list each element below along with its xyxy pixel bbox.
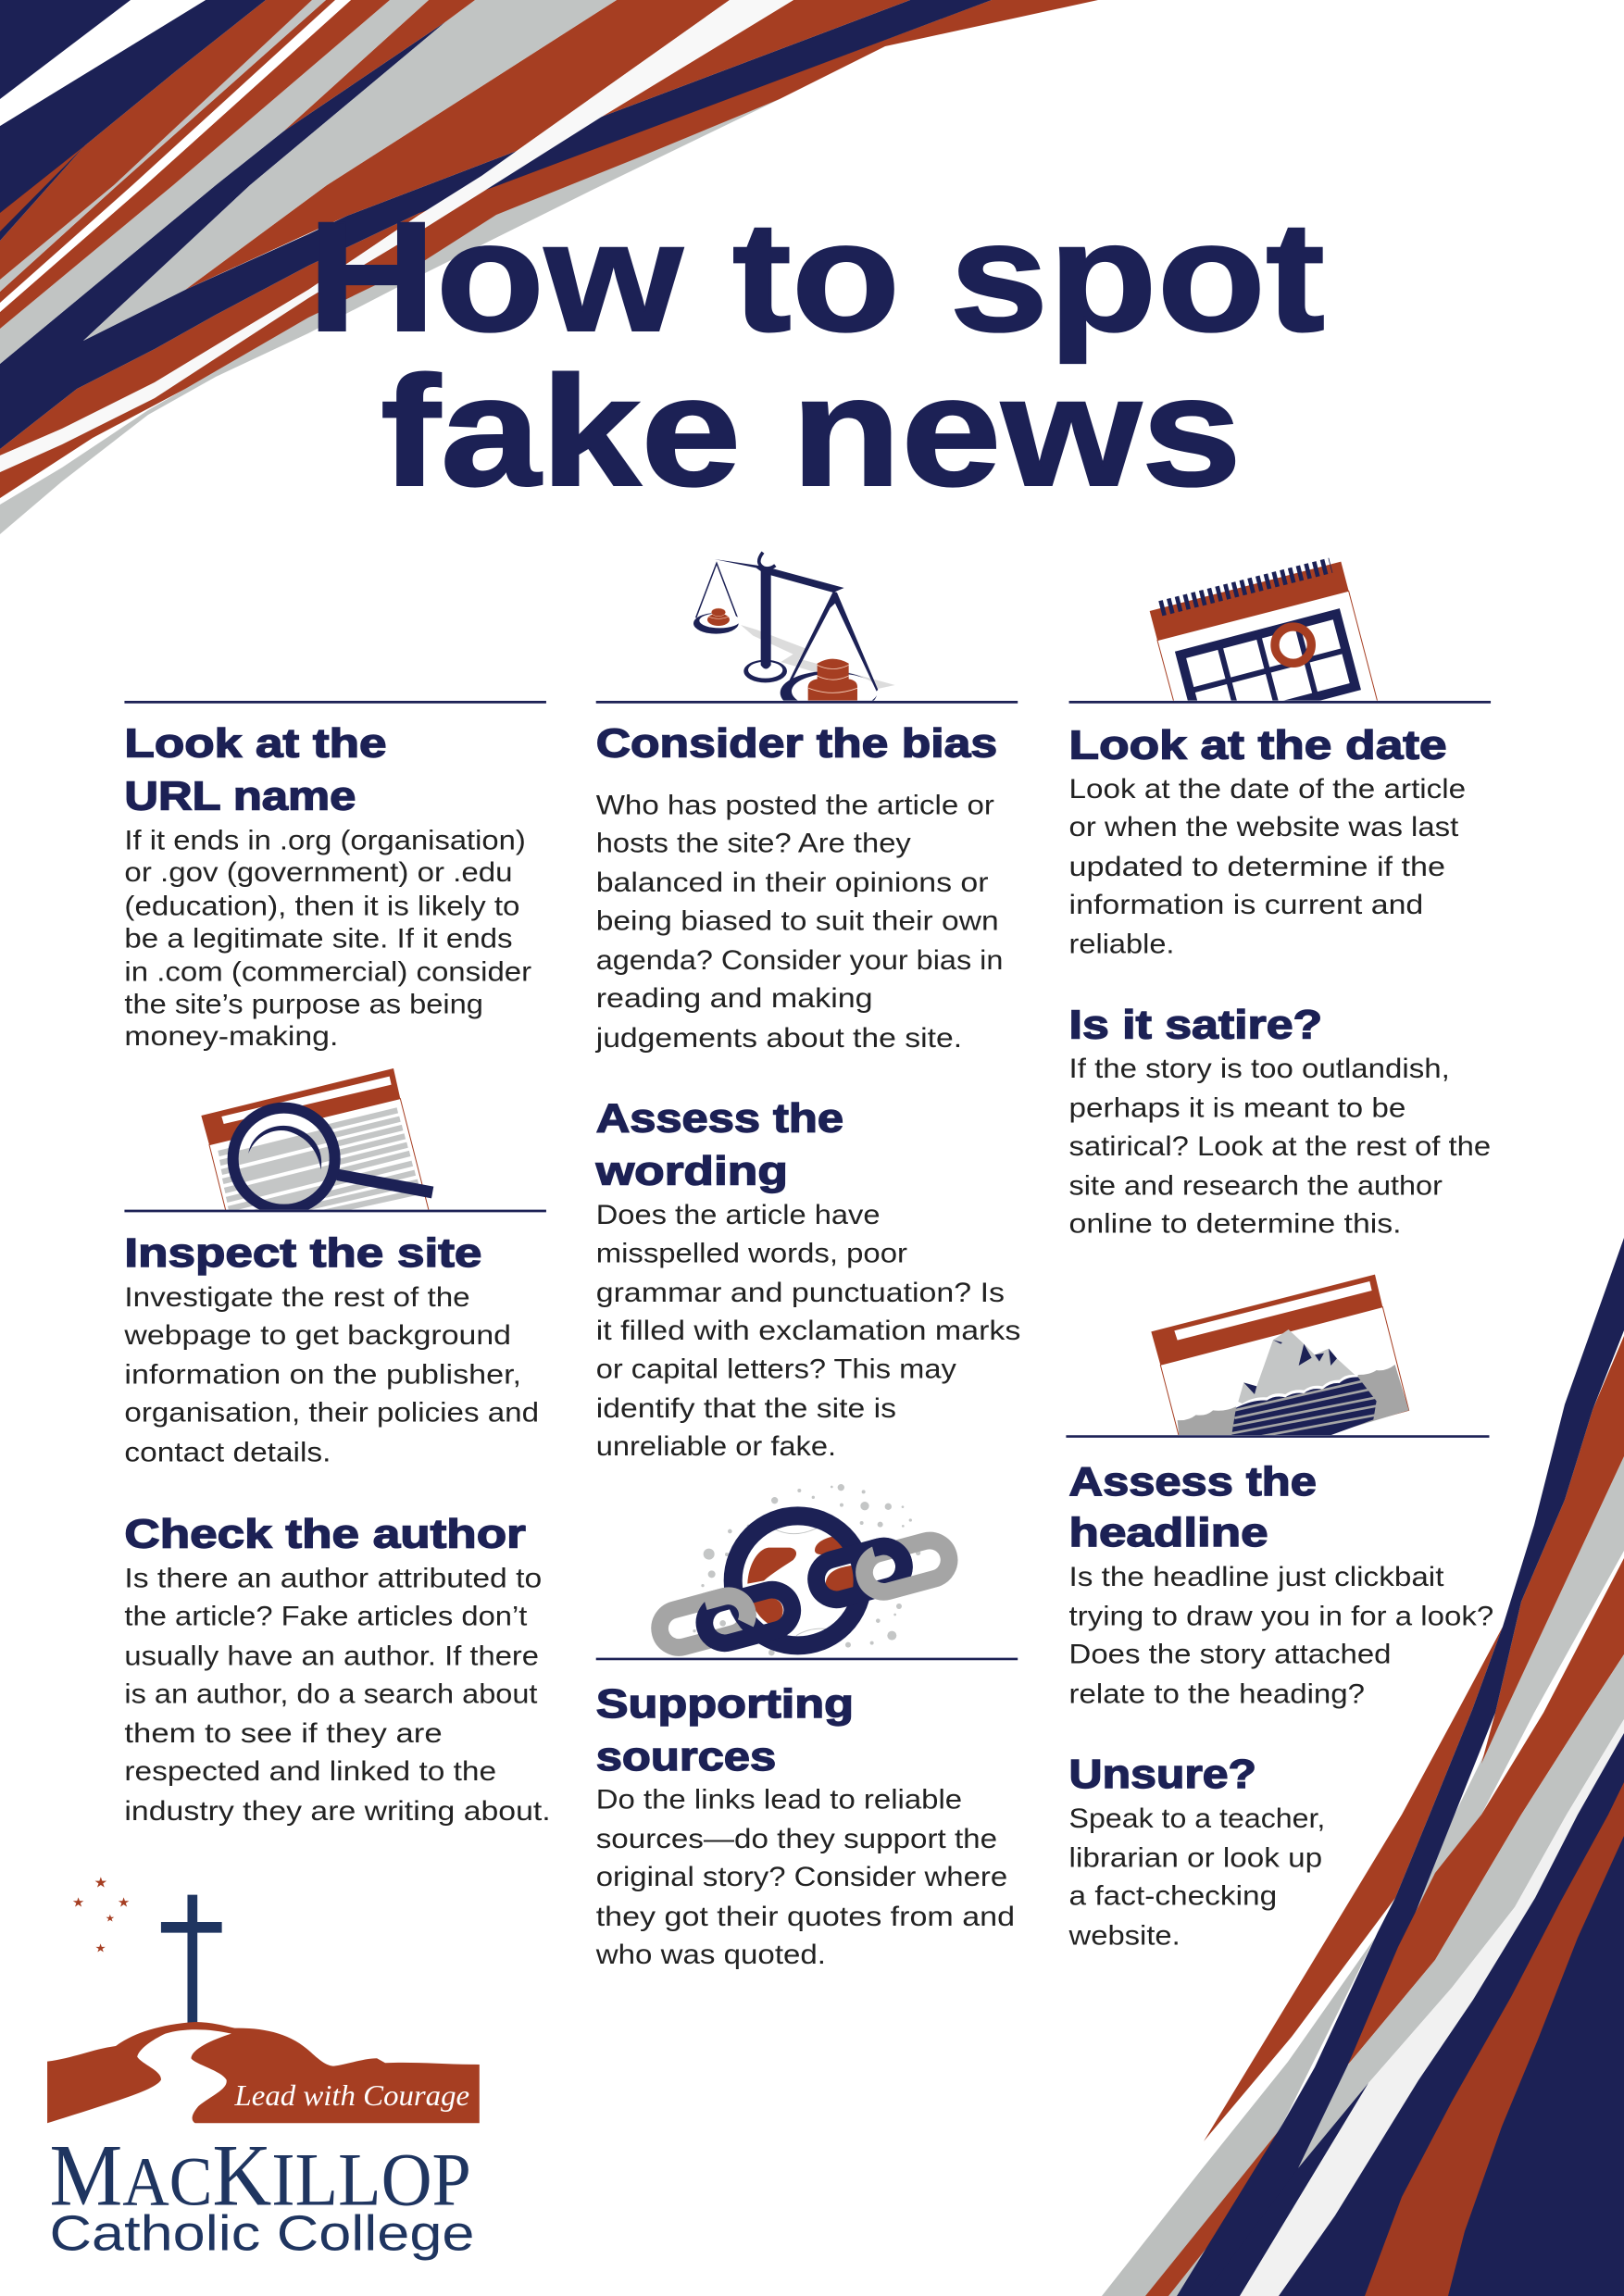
section: consider the bias: agenda? Consider your bias in [596,946,1003,976]
section: look at the date: updated to determine if the [1069,853,1445,882]
content columns [123,702,1493,1970]
section: check the author: the article? Fake articles don’t [124,1603,527,1632]
section: supporting sources: sources—do they support the [596,1825,997,1854]
section: supporting sources: Do the links lead to reliable [596,1785,962,1815]
section: supporting sources: original story? Consider where [596,1863,1007,1892]
section: look at the URL name: the site’s purpose as being [124,990,483,1019]
logo stars: ★ [118,1896,130,1910]
section: consider the bias: Consider the bias [596,722,997,767]
section: inspect the site: webpage to get background [123,1321,511,1351]
section: assess the headline: trying to draw you in for a look? [1069,1603,1493,1632]
section: assess the wording: unreliable or fake. [596,1432,836,1462]
section: inspect the site: organisation, their policies and [124,1399,539,1429]
section: supporting sources [595,1682,1015,1970]
icon: iceberg on web page [1151,1275,1409,1441]
section: look at the date [1069,723,1466,960]
section: unsure: website. [1068,1921,1181,1951]
icon: magnifying glass over web page [201,1068,433,1217]
section: assess the headline: headline [1069,1511,1268,1555]
section: assess the headline: Assess the [1069,1460,1317,1504]
icon: chain links over globe [656,1484,954,1655]
section: look at the URL name: If it ends in .org (organisation) [124,826,526,855]
section: is it satire: If the story is too outlandish, [1069,1054,1450,1084]
section: assess the wording: or capital letters? This may [596,1354,956,1384]
logo cross [161,1895,222,2023]
icon: calendar [1150,557,1378,701]
section: assess the wording: identify that the site is [596,1394,896,1424]
section: assess the wording: Assess the [596,1097,843,1142]
section: supporting sources: they got their quotes from and [596,1903,1015,1932]
bottom-right swoosh decoration [1102,1238,1624,2296]
section: inspect the site: information on the publisher, [124,1361,521,1391]
section: consider the bias: being biased to suit their own [596,906,999,936]
section: assess the wording: Does the article have [596,1201,881,1230]
panel: column 2 [594,702,1020,1970]
section: look at the date: Look at the date [1069,723,1447,767]
section: inspect the site: contact details. [124,1438,331,1467]
logo subtitle: Catholic College [50,2205,474,2261]
section: look at the URL name: be a legitimate site. If it ends [124,924,513,954]
section: check the author: respected and linked to the [124,1757,496,1787]
section: check the author: Is there an author attributed to [124,1564,542,1593]
section: look at the date: or when the website was last [1069,813,1458,842]
logo stars [72,1874,130,1955]
section: check the author: industry they are writing about. [124,1797,551,1827]
logo stars: ★ [94,1942,106,1955]
section: assess the wording: it filled with exclamation marks [596,1316,1020,1346]
section: inspect the site: Inspect the site [124,1231,481,1276]
section: is it satire: satirical? Look at the rest of the [1069,1132,1491,1162]
section: look at the URL name: URL name [124,775,356,819]
section: look at the URL name [124,722,531,1052]
section: unsure [1068,1753,1325,1951]
section: look at the date: Look at the date of the article [1069,775,1466,805]
logo: MacKillop Catholic College [47,1874,480,2261]
section: is it satire [1069,1003,1491,1240]
section: inspect the site [123,1231,539,1467]
icon: balance scales [693,553,895,715]
logo stars: ★ [72,1896,84,1910]
section: check the author: Check the author [124,1513,526,1557]
section: consider the bias: Who has posted the article or [596,791,994,820]
section: check the author: them to see if they are [124,1719,443,1749]
section: look at the date: information is current and [1069,891,1423,920]
section: assess the headline: Is the headline just clickbait [1069,1563,1443,1592]
section: supporting sources: who was quoted. [595,1940,826,1970]
logo stars: ★ [106,1913,115,1924]
section: unsure: librarian or look up [1069,1844,1322,1874]
section: assess the headline: relate to the heading? [1069,1679,1365,1709]
title [307,189,1325,518]
section: look at the URL name: in .com (commercial) consider [124,958,531,988]
section: check the author: usually have an author. If there [124,1641,539,1671]
logo motto: Lead with Courage [234,2080,469,2113]
stars around globe [693,1484,920,1655]
section: assess the wording [594,1097,1020,1462]
section: assess the wording: grammar and punctuation? Is [596,1279,1005,1308]
section: consider the bias [595,722,1003,1054]
section: supporting sources: sources [596,1735,776,1779]
section: look at the URL name: or .gov (government) or .edu [124,858,513,888]
section: is it satire: Is it satire? [1069,1003,1322,1047]
section: consider the bias: balanced in their opinions or [596,868,989,898]
section: assess the headline [1069,1460,1493,1709]
section: check the author [124,1513,551,1827]
section: consider the bias: judgements about the site. [595,1024,962,1054]
section: consider the bias: reading and making [596,984,873,1014]
logo hill with path [47,2022,480,2123]
section: consider the bias: hosts the site? Are they [596,829,911,858]
section: look at the URL name: money-making. [124,1022,338,1052]
section: assess the wording: wording [594,1150,788,1194]
section: unsure: Unsure? [1069,1753,1256,1797]
section: look at the URL name: Look at the [124,722,387,767]
section: check the author: is an author, do a search about [124,1679,537,1709]
title: fake news [381,343,1242,518]
panel: column 1 [123,702,551,1827]
section: assess the wording: misspelled words, poor [596,1239,907,1268]
top-left swoosh decoration [0,0,1098,534]
panel: column 3 [1066,702,1493,1951]
section: unsure: a fact-checking [1069,1882,1277,1912]
title: How to spot [307,189,1325,364]
section: assess the headline: Does the story attached [1069,1641,1392,1670]
section: is it satire: perhaps it is meant to be [1069,1094,1405,1124]
section: is it satire: site and research the author [1069,1172,1443,1202]
section: is it satire: online to determine this. [1069,1210,1402,1240]
section: supporting sources: Supporting [596,1682,854,1727]
section: look at the URL name: (education), then it is likely to [124,892,519,921]
logo wordmark: MACKILLOP [50,2128,471,2225]
section: unsure: Speak to a teacher, [1069,1804,1325,1834]
section: inspect the site: Investigate the rest of the [124,1283,470,1313]
section: look at the date: reliable. [1069,930,1174,960]
logo stars: ★ [94,1874,107,1891]
